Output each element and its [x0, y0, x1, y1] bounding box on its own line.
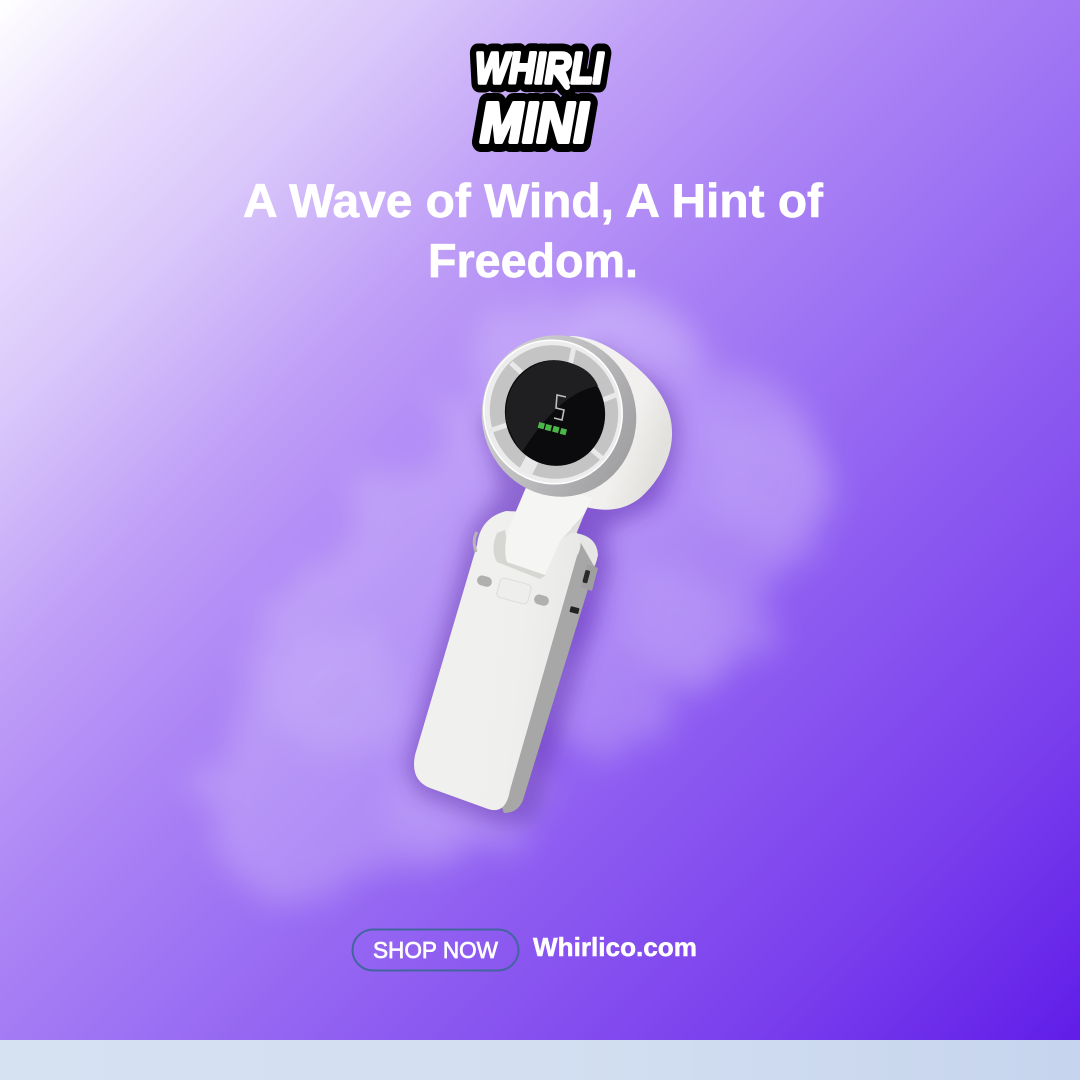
smoke cloud: base: [205, 290, 835, 900]
digit 5: [554, 395, 566, 420]
headline line 1: A Wave of Wind, A Hint of: [243, 174, 823, 227]
shop now button: [352, 930, 518, 970]
logo word: MINI: MINI: [480, 91, 589, 155]
vent ribs: [489, 347, 618, 473]
bottom band: [0, 1040, 1080, 1080]
logo word: WHIRLI: WHIRLI: [475, 44, 604, 93]
handle rim: [575, 533, 598, 566]
product shadow: [405, 345, 678, 825]
screen glare: [506, 361, 598, 452]
ring inner: [468, 325, 638, 499]
handle body: [414, 511, 581, 810]
product: handheld fan: [405, 318, 678, 825]
handle side: grey: [495, 535, 597, 813]
side slot: [569, 606, 580, 614]
left edge knob: [474, 532, 477, 552]
indicator left: [476, 574, 493, 588]
vent grey: [475, 331, 633, 493]
side button: [581, 564, 598, 591]
usb port: [582, 570, 590, 584]
website: Whirlico.com: [533, 932, 697, 962]
hinge recess shade: [494, 530, 546, 579]
indicator right: [533, 593, 550, 607]
shop now button: SHOP NOW: [373, 937, 498, 963]
hinge right shade: [560, 515, 584, 541]
logo word: WHIRLI: WHIRLI: [475, 44, 604, 93]
headline: [243, 174, 823, 287]
headline line 2: Freedom.: [428, 234, 638, 287]
logo: Whirli Mini: [475, 44, 604, 155]
center button: [496, 577, 532, 605]
silver ring: [464, 318, 654, 514]
smoke cloud: highlights: [275, 300, 820, 845]
hinge arm: [505, 478, 592, 575]
screen: [495, 351, 615, 475]
fan cylinder: [545, 336, 672, 510]
logo word: MINI: MINI: [480, 91, 589, 155]
battery level bars: [538, 422, 567, 435]
